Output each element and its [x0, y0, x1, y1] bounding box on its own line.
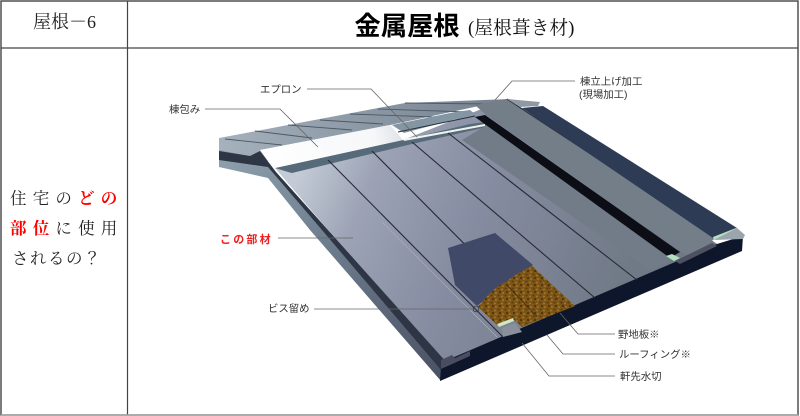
roof seams — [328, 133, 637, 337]
eave flashing piece — [497, 318, 522, 337]
label: ridge upturn: (現場加工) — [579, 88, 627, 101]
dark navy band — [522, 106, 737, 238]
ridge cover — [260, 125, 403, 168]
dark channel — [475, 115, 680, 258]
standing seam plank — [475, 99, 717, 257]
green strips — [666, 228, 738, 261]
label: roofing felt: ルーフィング※ — [619, 348, 691, 361]
eave notch — [441, 351, 470, 369]
right lower panel — [462, 125, 680, 270]
label: sheathing — [560, 313, 660, 341]
title: (屋根葺き材) — [468, 17, 574, 39]
label: sheathing: 野地板※ — [618, 328, 660, 341]
section number: 屋根－6 — [33, 12, 96, 32]
label: ridge wrap — [169, 103, 318, 147]
label: ridge upturn — [495, 75, 642, 101]
ridge flashing — [275, 122, 487, 173]
roofing layer — [448, 233, 533, 306]
label: ridge wrap: 棟包み — [169, 103, 200, 116]
label: eave drip flashing: 軒先水切 — [620, 371, 662, 383]
label: ridge upturn: 棟立上げ加工 — [580, 75, 642, 88]
label: screw fixing — [268, 302, 479, 315]
back roof slope — [219, 99, 510, 161]
title: 金属屋根 — [354, 11, 460, 41]
gable side face — [219, 150, 445, 381]
label: screw fixing: ビス留め — [268, 302, 310, 315]
label: this component — [220, 232, 353, 246]
plank cap — [507, 99, 540, 107]
cork decking — [478, 266, 575, 327]
label: apron — [260, 84, 417, 137]
question text: 住宅のどの — [10, 189, 124, 208]
title — [354, 11, 574, 41]
label: apron: エプロン — [260, 84, 302, 96]
label: this component: この部材 — [220, 232, 273, 246]
label: eave drip flashing — [522, 343, 662, 383]
apron — [392, 110, 485, 141]
roof diagram — [219, 99, 745, 381]
question text: 部位に使用 — [10, 219, 124, 238]
question text: されるの？ — [12, 249, 102, 268]
main roof surface — [275, 99, 720, 364]
gable dark band — [219, 151, 448, 370]
question text — [10, 189, 124, 268]
eave end cap — [714, 228, 745, 240]
eave dark fascia — [440, 236, 743, 381]
label: roofing felt — [547, 335, 691, 361]
